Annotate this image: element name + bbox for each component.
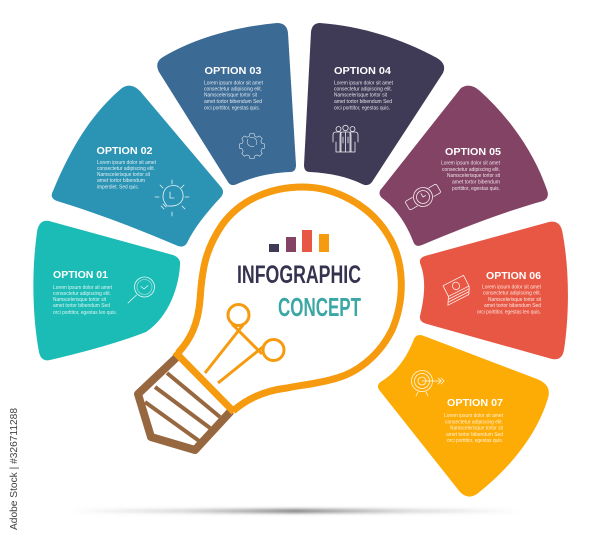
- option 07 body: orci porttitor, egestas quis.: [447, 438, 503, 444]
- option 01 body: Namscelerisque tortor sit: [53, 297, 107, 303]
- option 03 body: orci porttitor, egestas quis.: [204, 106, 260, 112]
- option 06 body: consectetur adipiscing elit.: [483, 290, 541, 296]
- option 03 body: consectetur adipiscing elit.: [204, 86, 262, 92]
- option 04 heading: OPTION 04: [334, 65, 391, 77]
- option 06 body: Namscelerisque tortor sit: [488, 297, 542, 303]
- title: [237, 261, 361, 322]
- icon: stack of money: [439, 275, 472, 305]
- option 02 heading: OPTION 02: [96, 145, 153, 157]
- option 07 body: amet tortor bibendum Sed: [446, 432, 503, 438]
- option 04 body: Namscelerisque tortor sit: [334, 92, 388, 98]
- option 02 body: [97, 160, 157, 190]
- option 07 body: Namscelerisque tortor sit: [450, 426, 504, 432]
- option 05 body: consectetur adipiscing elit.: [442, 167, 500, 173]
- option 07 body: consectetur adipiscing elit.: [445, 420, 503, 426]
- panel: option 01: [33, 221, 180, 360]
- option 02 body: imperdiet. Sed quis.: [97, 184, 139, 190]
- lightbulb: [138, 187, 401, 450]
- chart icon: bars: [269, 230, 329, 252]
- option 05 heading: OPTION 05: [445, 146, 501, 158]
- panel: option 03: [157, 23, 296, 185]
- option 05 body: amet tortor bibendum: [452, 180, 500, 186]
- bulb neck: [175, 352, 234, 412]
- title line 2: CONCEPT: [278, 292, 361, 322]
- option 01 heading: OPTION 01: [53, 269, 108, 281]
- option 05 body: porttitor, egestas quis.: [452, 186, 500, 192]
- panel: option 06: [420, 222, 568, 359]
- option 03 body: [204, 80, 264, 112]
- option 05 body: Namscelerisque tortor sit: [447, 173, 501, 179]
- option 04 body: orci porttitor, egestas quis.: [334, 106, 390, 112]
- option 07 heading: OPTION 07: [447, 397, 503, 409]
- panel: option 05: [380, 86, 548, 246]
- option 02 body: amet tortor bibendum: [97, 178, 145, 184]
- option 01 body: consectetur adipiscing elit.: [53, 291, 111, 297]
- option 05 body: Lorem ipsum dolor sit amet: [441, 160, 501, 166]
- icon: gear: [239, 134, 265, 159]
- option 02 body: consectetur adipiscing elit.: [97, 166, 155, 172]
- title line 1: INFOGRAPHIC: [237, 261, 361, 289]
- option 03 body: Namscelerisque tortor sit: [204, 92, 258, 98]
- option 03 heading: OPTION 03: [204, 65, 262, 77]
- panel: option 02: [52, 86, 223, 247]
- option 04 body: amet tortor bibendum Sed: [334, 99, 392, 105]
- option 06 body: [477, 284, 542, 316]
- option 07 body: Lorem ipsum dolor sit amet: [444, 413, 504, 419]
- option 02 body: Namscelerisque tortor sit: [97, 172, 151, 178]
- icon: magnifier with check: [128, 277, 154, 303]
- bulb glass outline: [178, 187, 401, 411]
- icon: business people: [333, 125, 358, 152]
- option 06 heading: OPTION 06: [486, 270, 541, 282]
- icon: idea bulb with clock: [155, 180, 189, 216]
- option 06 body: orci porttitor, egestas leo quis.: [477, 310, 541, 316]
- option 02 body: Lorem ipsum dolor sit amet: [97, 160, 157, 166]
- option 01 body: Lorem ipsum dolor sit amet: [53, 285, 113, 291]
- option 01 body: [53, 285, 117, 316]
- panel: option 07: [378, 335, 549, 497]
- option 04 body: consectetur adipiscing elit.: [334, 86, 392, 92]
- option 05 body: [441, 160, 501, 192]
- option 07 body: [444, 413, 504, 444]
- option 06 body: amet tortor bibendum Sed: [484, 303, 541, 309]
- watermark id text: Adobe Stock | #326711288: [9, 408, 20, 530]
- option 06 body: Lorem ipsum dolor sit amet: [482, 284, 542, 290]
- bulb base: [138, 357, 231, 450]
- option 04 body: Lorem ipsum dolor sit amet: [334, 80, 394, 86]
- icon: wristwatch: [403, 180, 443, 214]
- option 03 body: Lorem ipsum dolor sit amet: [204, 80, 264, 86]
- option 01 body: orci porttitor, egestas leo quis.: [53, 310, 117, 316]
- panel: option 04: [304, 23, 444, 185]
- option 04 body: [334, 80, 394, 112]
- icon: target with arrow: [412, 370, 444, 396]
- ground shadow: [70, 509, 520, 513]
- option 01 body: amet tortor bibendum Sed: [53, 303, 110, 309]
- option 03 body: amet tortor bibendum Sed: [204, 99, 262, 105]
- bulb filament: [205, 304, 284, 383]
